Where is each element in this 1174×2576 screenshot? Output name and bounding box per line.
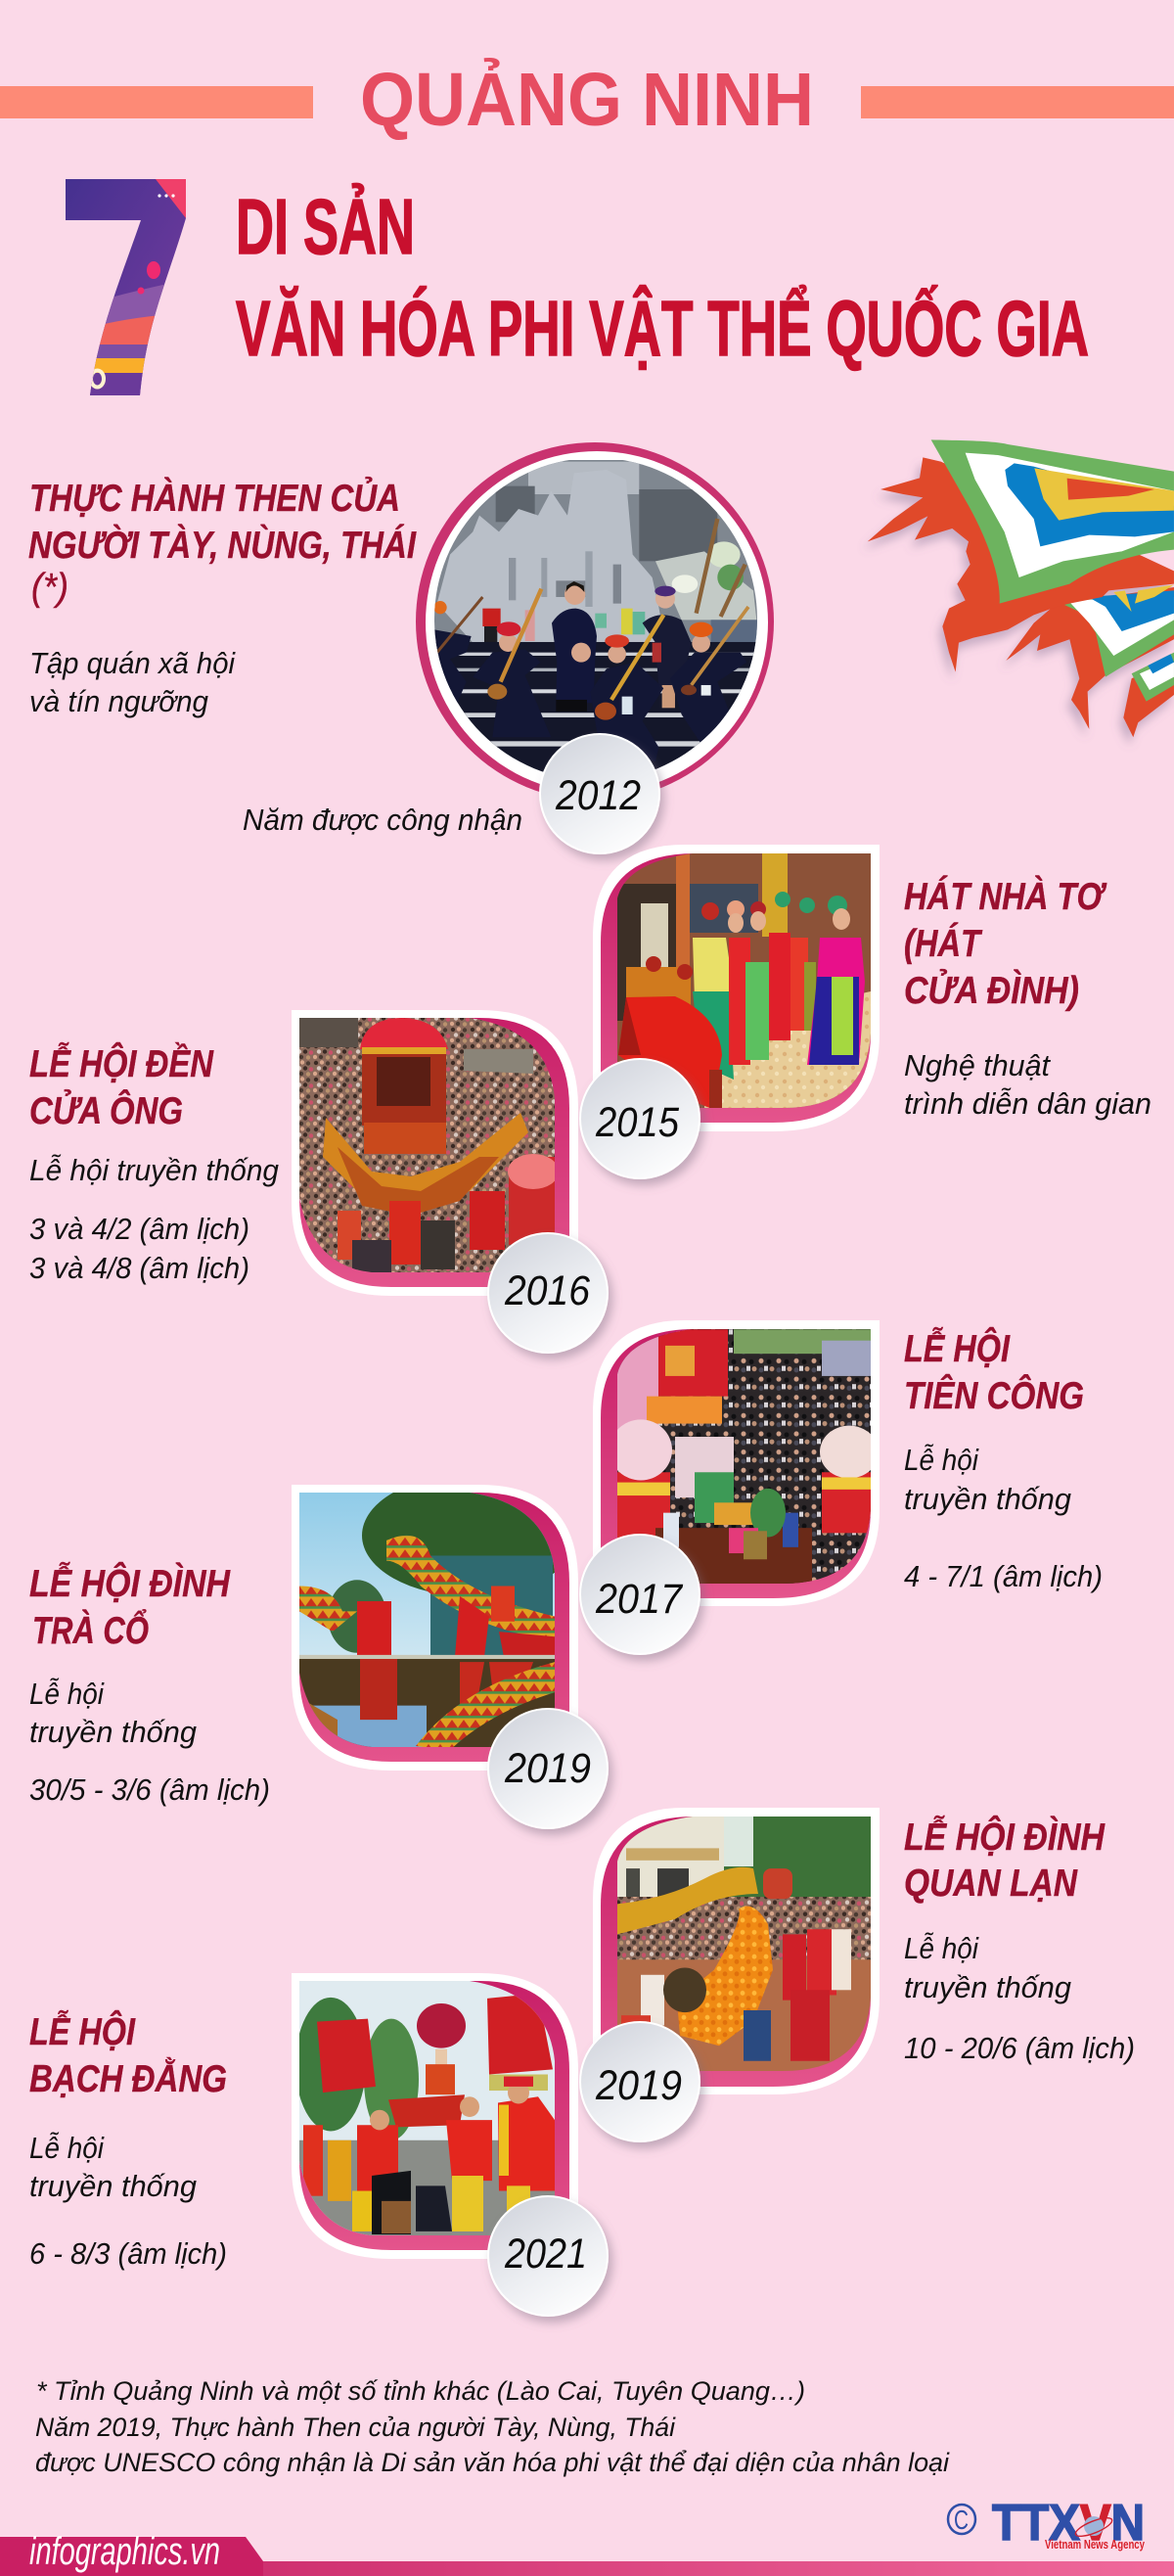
year badge 2019 right (580, 2022, 700, 2141)
panel: Lễ hội Bạch Đằng (2021) (29, 1973, 608, 2316)
text: Bạch Đằng details: Lễ hội (29, 2131, 105, 2165)
card photo: festival palanquin and crowd (292, 1010, 578, 1296)
panel: Lễ hội Tiên Công (2017) (580, 1320, 1103, 1654)
card photo: Tiên Công offerings (593, 1320, 880, 1606)
card photo: Hát nhà tơ performers (593, 845, 880, 1131)
text: Tiên Công heading: TIÊN CÔNG (904, 1373, 1084, 1417)
text: Thực hành Then heading: NGƯỜI TÀY, NÙNG, THÁI (28, 524, 417, 567)
text: Tiên Công details (904, 1443, 1103, 1593)
header band: Quảng Ninh: QUẢNG NINH (360, 57, 814, 142)
text: Trà Cổ heading: TRÀ CỔ (32, 1608, 149, 1652)
text: Trà Cổ details (29, 1677, 270, 1807)
big numeral 7 (66, 179, 186, 395)
text: Bạch Đằng heading: LỄ HỘI (29, 2009, 136, 2053)
text: Quan Lạn details: Lễ hội (904, 1931, 979, 1965)
text: Trà Cổ details: Lễ hội (29, 1677, 105, 1711)
year badge 2021 (488, 2196, 608, 2316)
text: Cửa Ông details: 3 và 4/2 (âm lịch) (29, 1212, 249, 1246)
card photo: lion dance (593, 1808, 880, 2094)
text: Trà Cổ details: 30/5 - 3/6 (âm lịch) (29, 1772, 270, 1807)
year badge 2012: 2012 (555, 772, 641, 819)
text: Bạch Đằng details: truyền thống (29, 2169, 197, 2203)
logo: TTXVN: C (954, 2505, 969, 2535)
decorative flag bunting (868, 439, 1174, 737)
text: Quan Lạn heading (904, 1815, 1106, 1905)
text: Bạch Đằng details (29, 2131, 227, 2271)
panel: Hát nhà tơ (2015) (580, 845, 1151, 1178)
header band: Quảng Ninh (0, 57, 1174, 142)
text: Quan Lạn details (904, 1931, 1135, 2065)
main title: DI SẢN (236, 183, 415, 270)
year badge 2015 (580, 1059, 700, 1178)
text: Bạch Đằng heading: BẠCH ĐẰNG (29, 2057, 227, 2100)
text: Tiên Công heading (904, 1326, 1084, 1417)
year badge 2015: 2015 (595, 1099, 680, 1146)
year badge 2017: 2017 (595, 1576, 684, 1623)
year badge 2019 right: 2019 (595, 2062, 682, 2109)
text: recognition year caption: Năm được công nhận (243, 803, 522, 837)
panel: Thực hành Then (2012) (28, 442, 774, 853)
text: Hát nhà tơ heading: HÁT NHÀ TƠ (904, 875, 1107, 918)
text: Cửa Ông details: Lễ hội truyền thống (29, 1153, 279, 1187)
text: Quan Lạn details: truyền thống (904, 1970, 1071, 2004)
year badge 2021: 2021 (504, 2231, 587, 2277)
text: Quan Lạn details: 10 - 20/6 (âm lịch) (904, 2031, 1135, 2065)
text: Hát nhà tơ category: Nghệ thuật (904, 1048, 1051, 1082)
text: Cửa Ông heading: CỬA ÔNG (29, 1088, 183, 1132)
text: Cửa Ông heading: LỄ HỘI ĐỀN (29, 1041, 214, 1085)
text: Hát nhà tơ heading: CỬA ĐÌNH) (904, 969, 1079, 1012)
text: Thực hành Then heading (28, 477, 417, 609)
card photo: Bạch Đằng procession (292, 1973, 578, 2259)
year badge 2017 (580, 1535, 700, 1654)
text: Thực hành Then heading: THỰC HÀNH THEN CỦA (29, 477, 400, 520)
year badge 2019 left: 2019 (504, 1745, 591, 1792)
text: Bạch Đằng heading (29, 2009, 227, 2100)
text: Tiên Công details: truyền thống (904, 1482, 1071, 1516)
year badge 2016 (488, 1233, 608, 1353)
footnote text: * Tỉnh Quảng Ninh và một số tỉnh khác (Lào Cai, Tuyên Quang…) (36, 2376, 805, 2406)
text: Hát nhà tơ heading: (HÁT (904, 922, 983, 965)
text: Quan Lạn heading: LỄ HỘI ĐÌNH (904, 1815, 1106, 1859)
footer band: infographics.vn: infographics.vn (29, 2530, 220, 2573)
circular photo: Then performers (416, 442, 774, 801)
year badge 2012 (540, 734, 659, 853)
text: Thực hành Then category (29, 646, 236, 718)
text: Cửa Ông details (29, 1153, 279, 1285)
footnote text (35, 2376, 950, 2477)
text: Thực hành Then heading: (*) (31, 567, 68, 609)
text: Hát nhà tơ category (904, 1048, 1151, 1121)
year badge 2019 left (488, 1709, 608, 1828)
text: Tiên Công details: Lễ hội (904, 1443, 979, 1477)
footnote text: Năm 2019, Thực hành Then của người Tày, Nùng, Thái (35, 2413, 676, 2442)
text: Trà Cổ heading (29, 1561, 231, 1652)
panel: Lễ hội đền Cửa Ông (2016) (29, 1010, 608, 1353)
text: Thực hành Then category: Tập quán xã hội (29, 646, 236, 680)
main title (236, 183, 1089, 372)
text: Tiên Công heading: LỄ HỘI (904, 1326, 1011, 1370)
panel: Lễ hội đình Trà Cổ (2019) (29, 1475, 608, 1828)
text: Thực hành Then category: và tín ngưỡng (29, 684, 208, 718)
card photo: dragon dance with reflection (292, 1475, 578, 1771)
text: Cửa Ông details: 3 và 4/8 (âm lịch) (29, 1251, 249, 1285)
year badge 2016: 2016 (504, 1267, 590, 1314)
footnote text: được UNESCO công nhận là Di sản văn hóa phi vật thể đại diện của nhân loại (35, 2448, 950, 2477)
text: Cửa Ông heading (29, 1041, 214, 1132)
panel: Lễ hội đình Quan Lạn (2019) (580, 1808, 1135, 2141)
text: Trà Cổ heading: LỄ HỘI ĐÌNH (29, 1561, 231, 1605)
footer band: infographics.vn (0, 2530, 1174, 2576)
text: Hát nhà tơ category: trình diễn dân gian (904, 1086, 1151, 1121)
text: Tiên Công details: 4 - 7/1 (âm lịch) (904, 1559, 1103, 1593)
text: Trà Cổ details: truyền thống (29, 1715, 197, 1749)
text: Hát nhà tơ heading (904, 875, 1107, 1012)
text: Quan Lạn heading: QUAN LẠN (904, 1863, 1078, 1905)
logo: TTXVN: TTXVN (992, 2495, 1145, 2552)
text: Bạch Đằng details: 6 - 8/3 (âm lịch) (29, 2236, 227, 2271)
